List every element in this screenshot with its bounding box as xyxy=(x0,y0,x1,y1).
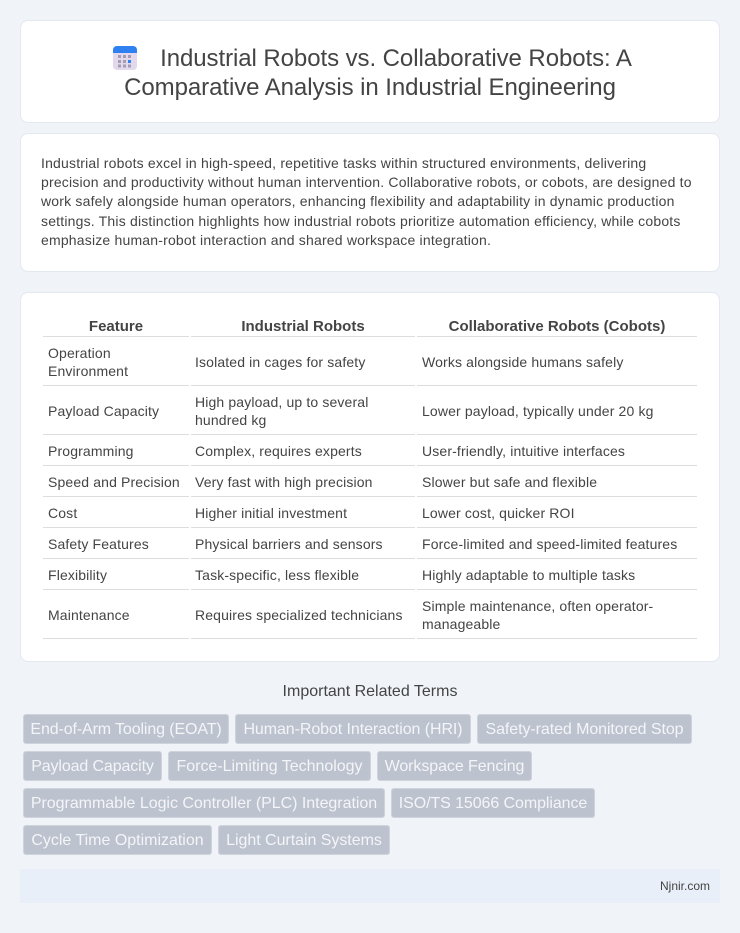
table: Lower cost, quicker ROI xyxy=(422,505,575,521)
table: Physical barriers and sensors xyxy=(195,536,383,552)
table: Collaborative Robots (Cobots) xyxy=(449,318,665,335)
table: manageable xyxy=(422,616,500,632)
tag list: related terms: Light Curtain Systems xyxy=(226,832,382,849)
panel: title card xyxy=(20,20,720,123)
table: Simple maintenance, often operator- xyxy=(422,598,653,614)
tag list: related terms: End-of-Arm Tooling (EOAT) xyxy=(30,721,222,738)
tag list: related terms: Cycle Time Optimization xyxy=(31,832,204,849)
table: Programming xyxy=(48,443,134,459)
heading: related terms: Important Related Terms xyxy=(283,683,457,700)
table: Works alongside humans safely xyxy=(422,354,623,370)
table: Complex, requires experts xyxy=(195,443,362,459)
table: Task-specific, less flexible xyxy=(195,567,359,583)
tag list: related terms: Human-Robot Interaction (HRI) xyxy=(243,721,463,738)
table: Highly adaptable to multiple tasks xyxy=(422,567,635,583)
footer xyxy=(20,869,720,903)
table: Environment xyxy=(48,363,128,379)
footer credit: Njnir.com xyxy=(660,879,710,893)
table: High payload, up to several xyxy=(195,394,368,410)
panel: intro text: settings. This distinction highlights how industrial robots prioritize automation efficiency, while cobots xyxy=(41,213,681,229)
table: Feature xyxy=(89,318,143,335)
icon: calendar xyxy=(113,46,137,70)
table: Operation xyxy=(48,345,111,361)
table: Isolated in cages for safety xyxy=(195,354,365,370)
tag list: related terms: ISO/TS 15066 Compliance xyxy=(399,795,587,812)
table: Higher initial investment xyxy=(195,505,347,521)
table: Safety Features xyxy=(48,536,149,552)
heading xyxy=(124,45,632,101)
panel: intro text: work safely alongside human operators, enhancing flexibility and adaptability in dynamic production xyxy=(41,193,675,209)
panel: intro text: emphasize human-robot interaction and shared workspace integration. xyxy=(41,232,491,248)
table xyxy=(43,318,697,639)
panel: intro text: precision and productivity without human intervention. Collaborative robots, or cobots, are designed to xyxy=(41,174,692,190)
table: Industrial Robots xyxy=(241,318,365,335)
tag list: related terms: Force-Limiting Technology xyxy=(177,758,362,775)
heading: Comparative Analysis in Industrial Engineering xyxy=(124,74,616,101)
table: hundred kg xyxy=(195,412,266,428)
table: Slower but safe and flexible xyxy=(422,474,597,490)
heading: Industrial Robots vs. Collaborative Robots: A xyxy=(160,45,632,72)
panel: intro text: Industrial robots excel in high-speed, repetitive tasks within structured environments, delivering xyxy=(41,155,646,171)
table: Speed and Precision xyxy=(48,474,180,490)
table: Requires specialized technicians xyxy=(195,607,403,623)
panel: comparison table xyxy=(20,292,720,662)
table: Maintenance xyxy=(48,607,130,623)
tag list: related terms: Programmable Logic Controller (PLC) Integration xyxy=(31,795,377,812)
table: Force-limited and speed-limited features xyxy=(422,536,677,552)
tag list: related terms: Safety-rated Monitored Stop xyxy=(486,721,683,738)
table: Flexibility xyxy=(48,567,107,583)
tag list: related terms xyxy=(23,714,692,855)
table: Payload Capacity xyxy=(48,403,159,419)
table: Cost xyxy=(48,505,77,521)
table: Very fast with high precision xyxy=(195,474,373,490)
tag list: related terms: Payload Capacity xyxy=(31,758,154,775)
tag list: related terms: Workspace Fencing xyxy=(385,758,524,775)
table: Lower payload, typically under 20 kg xyxy=(422,403,654,419)
table: User-friendly, intuitive interfaces xyxy=(422,443,625,459)
panel: intro text xyxy=(20,133,720,272)
